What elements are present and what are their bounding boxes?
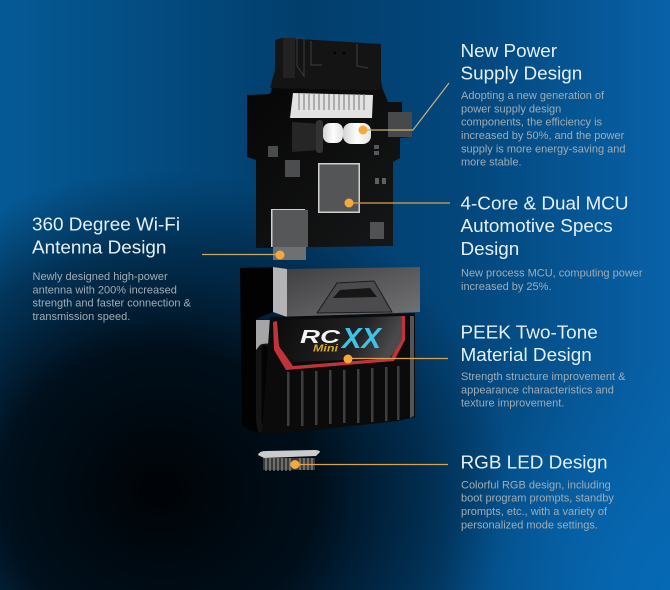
callout: antenna leader xyxy=(202,250,284,260)
logo: RC xyxy=(300,327,342,347)
callout: PEEK leader xyxy=(344,354,448,364)
antenna module xyxy=(271,209,308,260)
text block: RGB: RGB LED Design xyxy=(460,452,607,474)
text block: PEEK: texture improvement. xyxy=(461,398,564,410)
text block: RGB: boot program prompts, standby xyxy=(461,493,614,505)
callout: RGB leader xyxy=(290,460,448,469)
text block: power supply: more stable. xyxy=(461,157,522,169)
fins xyxy=(262,313,415,433)
text block: PEEK: PEEK Two-Tone xyxy=(460,322,598,344)
text block: antenna: transmission speed. xyxy=(32,311,130,323)
text block: power supply: power supply design xyxy=(461,103,561,115)
text block: MCU: increased by 25%. xyxy=(461,281,552,293)
circuit board xyxy=(247,88,412,248)
callout: power supply leader xyxy=(358,83,449,134)
text block: power supply: supply is more energy-saving and xyxy=(461,143,625,155)
logo plate xyxy=(280,316,402,362)
text block: RGB: Colorful RGB design, including xyxy=(461,479,611,491)
text block: antenna: 360 Degree Wi-Fi xyxy=(32,214,180,236)
text block: RGB xyxy=(460,452,614,531)
exploded device xyxy=(240,38,420,471)
text block: MCU: Automotive Specs xyxy=(460,216,613,237)
text block: MCU xyxy=(460,194,643,293)
text block: power supply: components, the efficiency is xyxy=(461,117,603,129)
text block: power supply: increased by 50%, and the power xyxy=(461,130,625,142)
text block: MCU: 4-Core & Dual MCU xyxy=(460,194,628,214)
connector pins xyxy=(290,93,373,118)
text block: antenna: Newly designed high-power xyxy=(32,271,168,283)
text block: antenna: Antenna Design xyxy=(32,238,166,258)
text block: MCU: New process MCU, computing power xyxy=(461,268,643,280)
top shell xyxy=(273,267,420,317)
logo: XX xyxy=(340,323,383,355)
logo xyxy=(300,323,383,355)
text block: power supply: Adopting a new generation of xyxy=(461,90,605,102)
text block: MCU: Design xyxy=(460,239,519,260)
text block: power supply xyxy=(460,41,625,169)
lower housing xyxy=(240,267,420,433)
text block: power supply: Supply Design xyxy=(460,64,582,84)
text block: antenna: antenna with 200% increased xyxy=(32,284,177,296)
callout: MCU leader xyxy=(344,198,450,208)
text block: PEEK: Strength structure improvement & xyxy=(461,371,626,383)
text block: PEEK xyxy=(460,322,626,410)
HDMI-style connector xyxy=(270,38,383,90)
red trim xyxy=(273,316,405,370)
text block: RGB: prompts, etc., with a variety of xyxy=(461,506,608,518)
text block: PEEK: Material Design xyxy=(460,345,592,366)
logo: Mini xyxy=(313,342,339,354)
capacitors xyxy=(323,123,371,144)
RGB LED strip xyxy=(258,450,320,471)
text block: antenna: strength and faster connection & xyxy=(32,298,192,310)
text block: RGB: personalized mode settings. xyxy=(461,519,598,531)
MCU chip xyxy=(318,163,360,213)
text block: PEEK: appearance characteristics and xyxy=(461,384,614,396)
text block: antenna xyxy=(32,214,192,323)
text block: power supply: New Power xyxy=(460,41,557,62)
